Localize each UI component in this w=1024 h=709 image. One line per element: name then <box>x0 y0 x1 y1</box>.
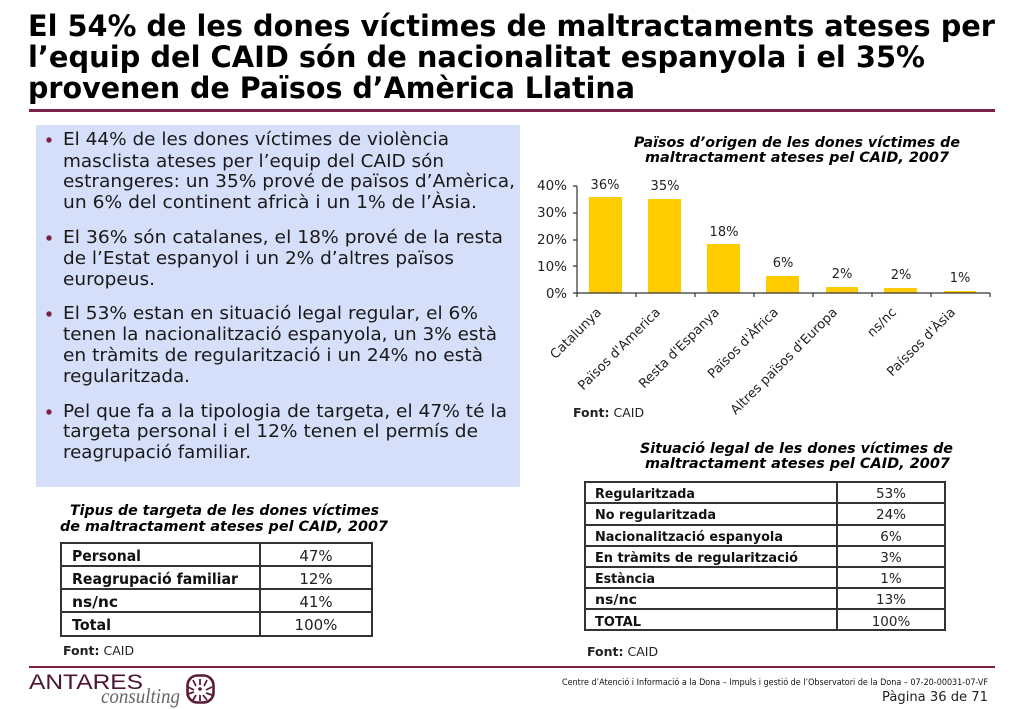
bullet text: legal status: tenen la nacionalització espanyola, un 3% està <box>63 324 497 345</box>
title: provenen de Països d’Amèrica Llatina <box>28 71 635 105</box>
table: legal status: 1% <box>880 571 902 587</box>
heading: legal status table: Situació legal de les dones víctimes de <box>640 441 953 457</box>
category labels <box>548 305 959 418</box>
table: legal status: En tràmits de regularització <box>595 550 798 566</box>
table: card type: 12% <box>299 570 333 588</box>
table: legal status: 53% <box>876 486 906 502</box>
footer: page number: Pàgina 36 de 71 <box>882 690 988 705</box>
bullet text: catalanes: europeus. <box>63 269 155 290</box>
value labels: 2% <box>832 267 852 282</box>
table: legal status: No regularitzada <box>595 507 716 523</box>
chart heading: countries of origin: maltractament ateses pel CAID, 2007 <box>645 150 949 166</box>
heading: card type table <box>60 503 388 535</box>
table: card type: Reagrupació familiar <box>72 570 239 588</box>
bullet text: card type: reagrupació familiar. <box>63 442 251 463</box>
y axis labels: 20% <box>537 233 567 248</box>
y axis labels <box>537 179 567 302</box>
value labels: 18% <box>710 225 738 240</box>
category labels: ns/nc <box>865 305 900 340</box>
chart heading: countries of origin: Països d’origen de les dones víctimes de <box>634 135 960 151</box>
chart heading: countries of origin <box>634 135 960 166</box>
value labels: 35% <box>651 179 679 194</box>
bullet text: origin: estrangeres: un 35% prové de països d’Amèrica, <box>63 171 515 192</box>
bar chart: countries of origin <box>537 178 990 418</box>
category labels: Paíssos d'Àsia <box>884 305 959 380</box>
value labels: 2% <box>891 268 911 283</box>
category labels: Catalunya <box>548 305 605 362</box>
heading: legal status table <box>640 441 953 472</box>
footer: document reference: Centre d’Atenció i Informació a la Dona – Impuls i gestió de l’Observatori de la Dona – 07-20-00031-07-VF <box>562 677 988 688</box>
value labels: 36% <box>591 178 619 193</box>
table: card type: 47% <box>299 547 333 565</box>
y axis labels: 30% <box>537 206 567 221</box>
title: El 54% de les dones víctimes de maltractaments ateses per <box>28 9 996 43</box>
value labels <box>591 178 970 286</box>
bullet text: catalanes <box>46 227 503 290</box>
category labels: Països d'America <box>575 305 664 394</box>
bullet text: card type: targeta personal i el 12% tenen el permís de <box>63 421 478 442</box>
panel: key findings <box>36 125 520 487</box>
value labels: 6% <box>773 256 793 271</box>
category labels: Països d'Àfrica <box>704 305 782 382</box>
source: card type: Font: CAID <box>63 643 134 658</box>
logo: Antares consulting: consulting <box>101 684 180 708</box>
bullet text: legal status: regularitzada. <box>63 366 190 387</box>
heading: card type table: de maltractament ateses pel CAID, 2007 <box>60 519 388 535</box>
axes <box>573 186 990 297</box>
bullet text: legal status <box>46 303 497 387</box>
category labels: Resta d'Espanya <box>636 305 723 392</box>
y axis labels: 40% <box>537 179 567 194</box>
table: legal status: 13% <box>876 592 906 608</box>
bullet text: origin <box>46 129 515 213</box>
table: legal status: ns/nc <box>595 592 637 608</box>
bullet text: legal status: en tràmits de regularització i un 24% no està <box>63 345 483 366</box>
table: legal status: 3% <box>880 550 902 566</box>
table: card type: ns/nc <box>72 593 118 611</box>
bullet text: origin: masclista ateses per l’equip del CAID són <box>63 151 444 172</box>
table: card type: Personal <box>72 547 141 565</box>
bullet text: legal status: El 53% estan en situació legal regular, el 6% <box>63 303 478 324</box>
table: legal status: Estància <box>595 571 655 587</box>
source: legal status: Font: CAID <box>587 644 658 659</box>
value labels: 1% <box>950 271 970 286</box>
y axis labels: 10% <box>537 260 567 275</box>
title <box>28 9 996 105</box>
table: legal status: TOTAL <box>595 614 641 630</box>
logo: Antares consulting: ANTARES <box>29 671 143 694</box>
table: legal status: 100% <box>872 614 910 630</box>
y axis labels: 0% <box>546 287 567 302</box>
bullet text: origin: un 6% del continent africà i un 1% de l’Àsia. <box>63 191 477 213</box>
table: legal status <box>585 482 945 630</box>
bullet text: catalanes: El 36% són catalanes, el 18% prové de la resta <box>63 227 503 248</box>
table: legal status: Nacionalització espanyola <box>595 529 783 545</box>
table: card type: Total <box>72 616 111 634</box>
category labels: Altres països d'Europa <box>728 305 841 418</box>
bullet text: card type <box>46 401 507 463</box>
logo: Antares consulting <box>29 671 214 708</box>
table: legal status: Regularitzada <box>595 486 695 502</box>
source: chart: Font: CAID <box>573 405 644 420</box>
table: card type: 41% <box>299 593 333 611</box>
table: card type <box>61 543 372 636</box>
bullet text: origin: El 44% de les dones víctimes de violència <box>63 129 449 150</box>
bullet text: card type: Pel que fa a la tipologia de targeta, el 47% té la <box>63 401 507 422</box>
table: card type: 100% <box>295 616 337 634</box>
table: legal status: 6% <box>880 529 902 545</box>
table: legal status: 24% <box>876 507 906 523</box>
bullet text: catalanes: de l’Estat espanyol i un 2% d’altres països <box>63 248 454 269</box>
icon: sunburst emblem <box>188 676 214 702</box>
heading: card type table: Tipus de targeta de les dones víctimes <box>70 503 379 519</box>
bars <box>589 197 976 293</box>
title: l’equip del CAID són de nacionalitat espanyola i el 35% <box>28 40 925 74</box>
heading: legal status table: maltractament ateses pel CAID, 2007 <box>645 456 950 472</box>
